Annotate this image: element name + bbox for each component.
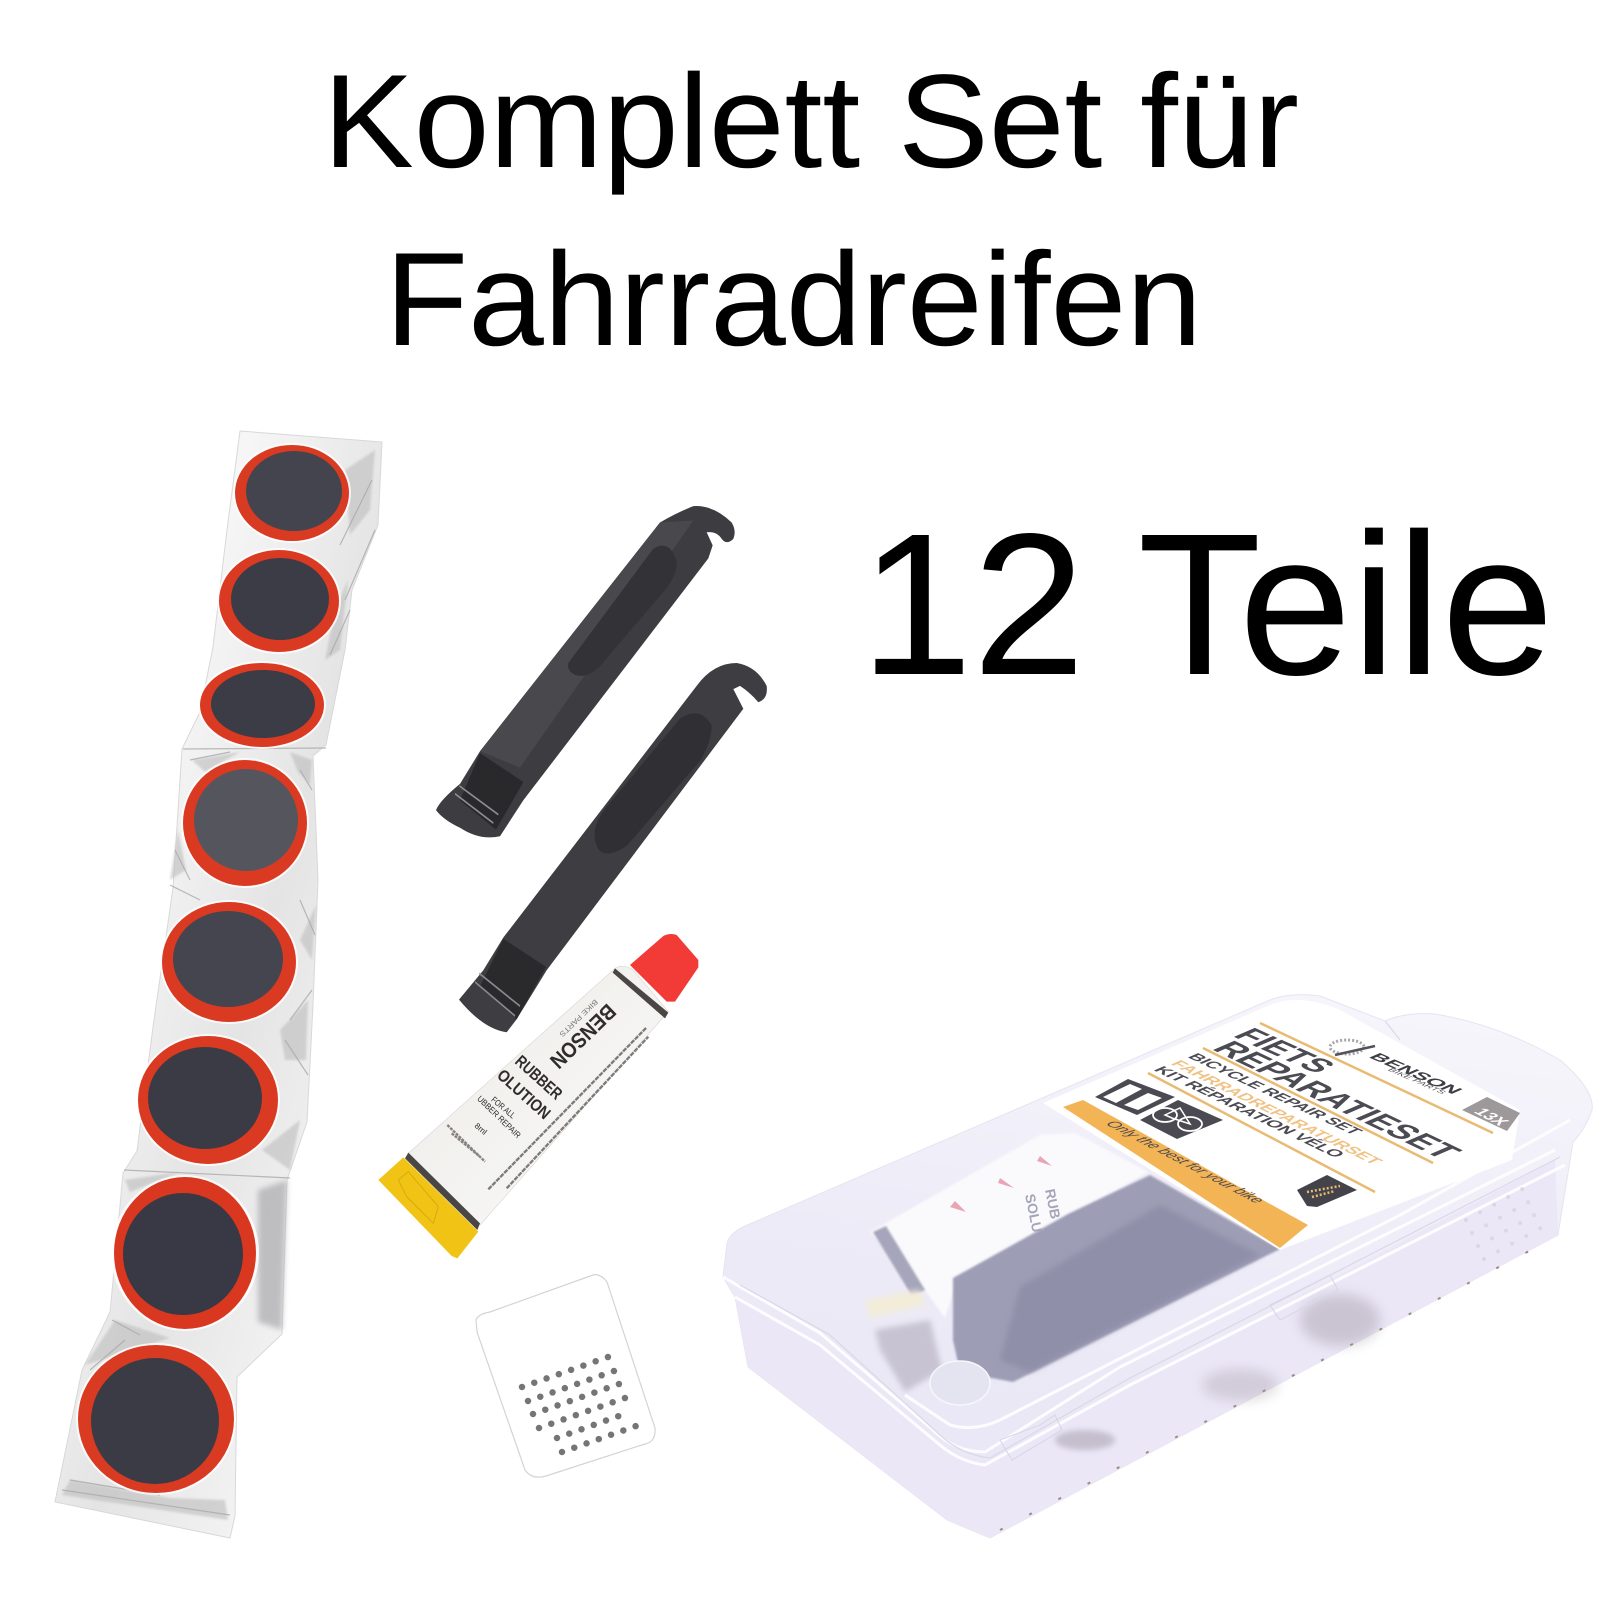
label headings: FIETS	[1226, 1024, 1344, 1077]
label sheet	[1043, 1000, 1520, 1250]
foil strip with eight patches	[55, 431, 382, 1538]
lid foot circle	[930, 1361, 990, 1405]
patch 6	[136, 1034, 280, 1166]
foil backing	[55, 431, 382, 1538]
lower wall tint	[735, 1160, 1558, 1538]
tube label text: BENSON	[545, 999, 621, 1073]
lid rim highlights	[723, 1120, 1570, 1465]
label band: Only the best for your bike	[1101, 1119, 1268, 1205]
title	[323, 48, 1299, 374]
label headings: REPARATIESET	[1204, 1037, 1469, 1163]
icon: tools pictogram	[1095, 1079, 1175, 1115]
patch 1	[233, 443, 351, 543]
icon: tire lever 1	[436, 506, 735, 837]
patch 7	[111, 1175, 259, 1331]
label headings: KIT RÉPARATION VÉLO	[1149, 1064, 1350, 1160]
tube cap	[630, 934, 698, 1002]
icon: bicycle pictogram	[1140, 1100, 1223, 1139]
patch 5	[160, 900, 298, 1024]
icon: glue tube	[378, 934, 698, 1258]
label band	[1063, 1100, 1308, 1248]
brand logo: BENSON	[1364, 1051, 1467, 1096]
heading: piece count: 12 Teile	[860, 491, 1554, 717]
box contents: items inside	[865, 1133, 1380, 1450]
icon: shield	[1297, 1175, 1357, 1207]
tube body	[408, 966, 668, 1225]
plastic repair kit box	[723, 995, 1592, 1538]
patch 8	[76, 1343, 236, 1495]
brand logo: BIKE PARTS	[1385, 1067, 1448, 1095]
label headings: FAHRRADREPARATURSET	[1166, 1059, 1386, 1167]
label rules	[1148, 1023, 1493, 1192]
patch 2	[217, 548, 341, 654]
tube label text: FOR ALL	[489, 1095, 518, 1121]
title: Komplett Set für	[323, 48, 1299, 196]
product label	[1043, 1000, 1520, 1250]
box contents: items inside: SOLU	[1022, 1192, 1046, 1234]
label headings: BICYCLE REPAIR SET	[1183, 1052, 1366, 1137]
tube label text: RUBBER	[511, 1052, 566, 1104]
tube label text: OLUTION	[493, 1066, 554, 1123]
icon: tire lever 2	[459, 663, 767, 1032]
badge: 13X	[1462, 1097, 1520, 1131]
tube collars	[613, 968, 668, 1018]
patch 3	[198, 661, 326, 749]
box shell	[723, 995, 1592, 1538]
bottom edge specks	[1000, 1240, 1550, 1530]
title: Fahrradreifen	[385, 226, 1202, 374]
badge: 13X: 13X	[1469, 1106, 1514, 1128]
patch 4	[181, 758, 309, 888]
tube label text: 8ml	[473, 1121, 489, 1137]
brand logo	[1330, 1040, 1467, 1096]
icon: sandpaper plate	[476, 1275, 655, 1477]
tube label text: UBBER REPAIR	[475, 1094, 523, 1140]
tube label text: BIKE PARTS	[558, 998, 600, 1039]
lid dot texture	[1466, 1185, 1548, 1259]
box contents: items inside: RUB	[1042, 1187, 1064, 1220]
tube crimp	[378, 1157, 478, 1258]
tube label text	[473, 998, 621, 1140]
